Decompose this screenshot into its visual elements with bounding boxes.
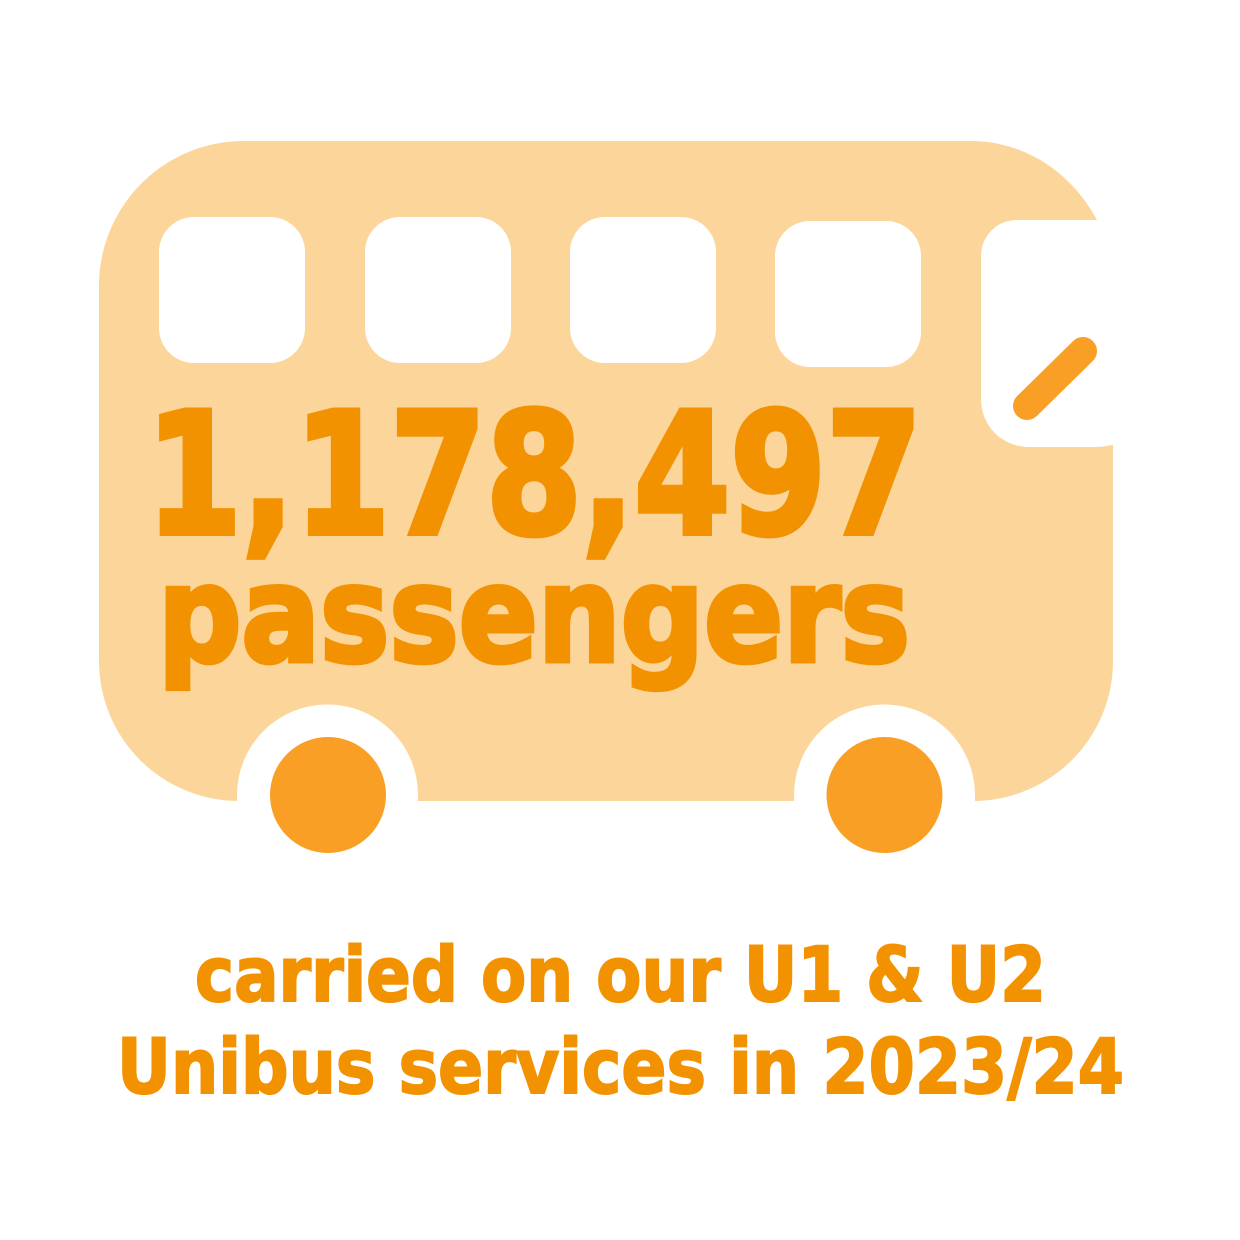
icon: bus — [99, 141, 1116, 853]
wiper — [1027, 351, 1083, 406]
caption line 1: carried on our U1 & U2 — [195, 930, 1046, 1019]
front wheel — [794, 704, 975, 853]
caption line 2: Unibus services in 2023/24 — [117, 1022, 1124, 1111]
passenger count: 1,178,497 — [146, 377, 922, 573]
front windscreen — [981, 220, 1116, 447]
rear wheel — [237, 704, 418, 853]
bus body — [99, 141, 1113, 801]
bus windows — [159, 217, 921, 367]
passengers label: passengers — [158, 539, 910, 693]
caption — [117, 930, 1124, 1111]
